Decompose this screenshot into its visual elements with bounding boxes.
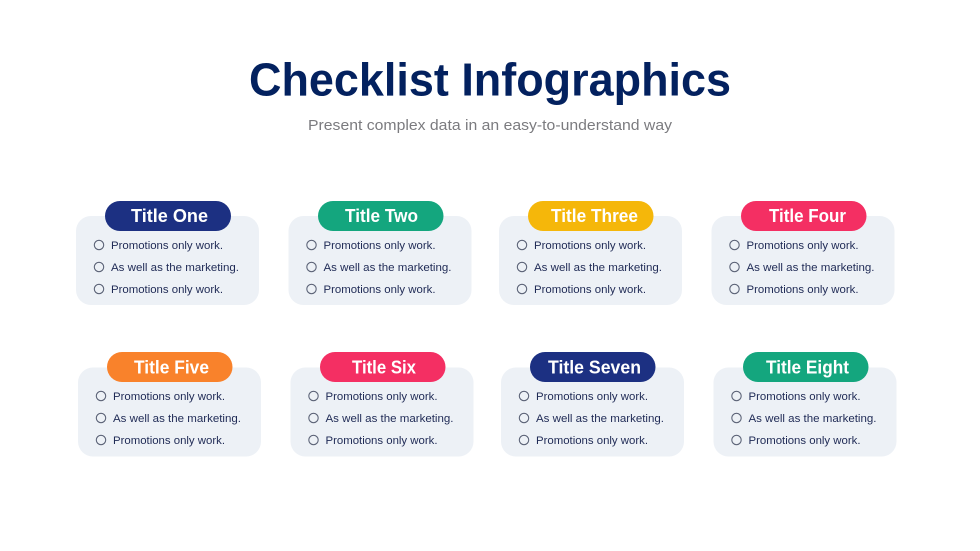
checklist: title six: As well as the marketing. bbox=[326, 413, 454, 425]
heading pill: title six bbox=[320, 352, 446, 382]
heading pill: title six: Title Six bbox=[352, 358, 416, 378]
heading pill: title one bbox=[105, 201, 231, 231]
heading pill: title seven bbox=[530, 352, 656, 382]
checklist: title one: As well as the marketing. bbox=[111, 262, 239, 274]
heading pill: title two bbox=[318, 201, 444, 231]
checklist: title five bbox=[96, 391, 241, 447]
checklist: title six bbox=[309, 391, 454, 447]
checklist: title six: Promotions only work. bbox=[326, 435, 438, 447]
heading pill: title three: Title Three bbox=[551, 206, 638, 226]
checklist: title four: As well as the marketing. bbox=[746, 262, 874, 274]
heading pill: title eight: Title Eight bbox=[766, 358, 849, 378]
checklist: title seven bbox=[519, 391, 664, 447]
checklist: title five: As well as the marketing. bbox=[113, 413, 241, 425]
heading pill: title three bbox=[528, 201, 654, 231]
heading pill: title four bbox=[741, 201, 866, 231]
panel: title one bbox=[76, 201, 259, 305]
heading pill: title five: Title Five bbox=[134, 358, 209, 378]
checklist: title two: Promotions only work. bbox=[324, 240, 436, 252]
checklist: title one: Promotions only work. bbox=[111, 284, 223, 296]
panel: title five bbox=[78, 352, 261, 456]
panel: title eight bbox=[714, 352, 896, 456]
title: Checklist Infographics bbox=[249, 54, 731, 106]
checklist: title three: As well as the marketing. bbox=[534, 262, 662, 274]
checklist: title two: As well as the marketing. bbox=[324, 262, 452, 274]
checklist: title eight: As well as the marketing. bbox=[748, 413, 876, 425]
panel: title six bbox=[290, 352, 474, 456]
checklist: title three bbox=[517, 240, 662, 296]
panel: title seven bbox=[501, 352, 684, 456]
heading pill: title eight bbox=[743, 352, 868, 382]
checklist: title seven: As well as the marketing. bbox=[536, 413, 664, 425]
checklist: title four: Promotions only work. bbox=[746, 240, 858, 252]
checklist: title five: Promotions only work. bbox=[113, 435, 225, 447]
checklist: title eight: Promotions only work. bbox=[748, 435, 860, 447]
checklist: title three: Promotions only work. bbox=[534, 284, 646, 296]
checklist: title one: Promotions only work. bbox=[111, 240, 223, 252]
checklist: title two: Promotions only work. bbox=[324, 284, 436, 296]
panel: title three bbox=[499, 201, 682, 305]
heading pill: title five bbox=[107, 352, 232, 382]
heading pill: title two: Title Two bbox=[345, 206, 418, 226]
checklist: title seven: Promotions only work. bbox=[536, 391, 648, 403]
subtitle: Present complex data in an easy-to-understand way bbox=[308, 118, 673, 134]
checklist: title one bbox=[94, 240, 239, 296]
checklist: title eight: Promotions only work. bbox=[748, 391, 860, 403]
checklist: title seven: Promotions only work. bbox=[536, 435, 648, 447]
panel: title four bbox=[712, 201, 894, 305]
heading pill: title one: Title One bbox=[131, 206, 208, 226]
heading pill: title four: Title Four bbox=[769, 206, 846, 226]
checklist: title six: Promotions only work. bbox=[326, 391, 438, 403]
checklist: title five: Promotions only work. bbox=[113, 391, 225, 403]
checklist: title three: Promotions only work. bbox=[534, 240, 646, 252]
panel: title two bbox=[288, 201, 472, 305]
checklist: title two bbox=[307, 240, 452, 296]
checklist: title eight bbox=[732, 391, 876, 447]
checklist: title four: Promotions only work. bbox=[746, 284, 858, 296]
checklist: title four bbox=[730, 240, 874, 296]
heading pill: title seven: Title Seven bbox=[548, 358, 641, 378]
